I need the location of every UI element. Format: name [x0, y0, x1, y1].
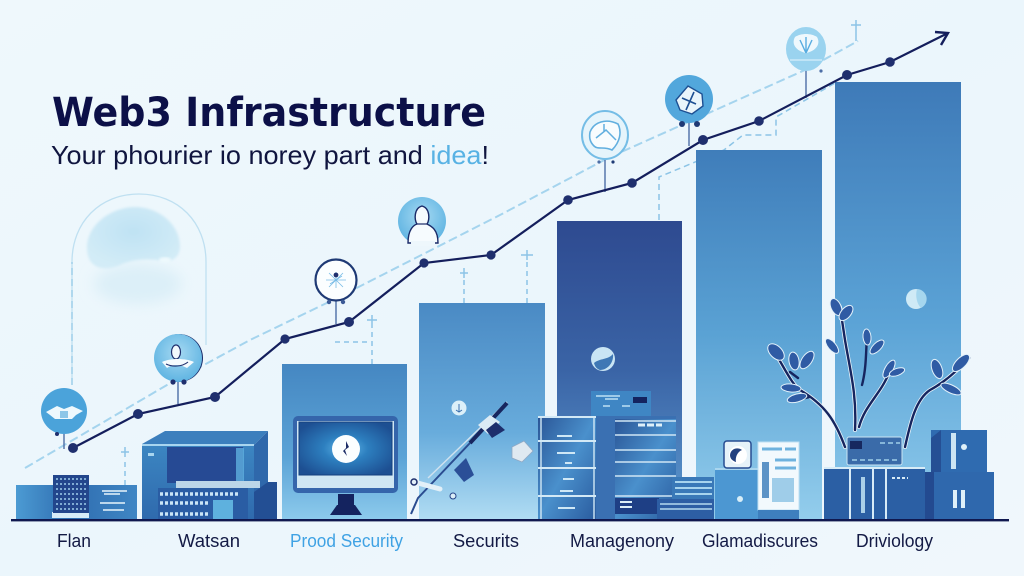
icon: box on blue circle [41, 388, 87, 436]
rack B [615, 419, 676, 519]
subtitle: Your phourier io norey part and idea! [51, 140, 489, 170]
dashed guides and plus marks [25, 20, 861, 485]
category labels [57, 531, 933, 551]
icon stems [64, 68, 806, 449]
bar 7 with sphere [835, 82, 961, 519]
bar 6 [696, 150, 822, 519]
bar 1 with keypad [16, 475, 137, 519]
plant with branches [765, 297, 972, 447]
document stack [715, 441, 799, 519]
title: Web3 Infrastructure [52, 90, 486, 136]
line data points [68, 57, 895, 453]
bar 5 with globe [557, 221, 682, 519]
bar 2: desktop device [142, 431, 277, 519]
label: Glamadiscures: Glamadiscures [702, 531, 818, 551]
icon: pale leaf circle [786, 27, 826, 73]
label: Flan: Flan [57, 531, 91, 551]
baseline axis [11, 519, 1009, 521]
label: Managenony: Managenony [570, 531, 674, 551]
light cube [512, 441, 533, 462]
label: Driviology: Driviology [856, 531, 933, 551]
label: Securits: Securits [453, 531, 519, 551]
bar 3 with monitor [282, 364, 407, 519]
icon: blue gear circle [665, 75, 713, 127]
server racks [538, 391, 714, 519]
white dial ornament [452, 400, 466, 416]
low drives [657, 477, 714, 519]
top switch box [591, 391, 651, 416]
rack A [538, 416, 596, 519]
icon: pale map circle [582, 111, 628, 164]
bar 4 with tool [411, 303, 545, 519]
dome outline panel with blob [72, 194, 206, 385]
icon: starburst white circle [316, 260, 356, 304]
icon: figure on light blue circle [154, 334, 203, 385]
right server tower [925, 430, 994, 519]
growth line with arrow [73, 32, 948, 448]
plant base and desk units [824, 437, 925, 519]
label: Prood Security: Prood Security [290, 531, 403, 551]
label: Watsan: Watsan [178, 531, 240, 551]
icon: person circle [398, 197, 446, 246]
